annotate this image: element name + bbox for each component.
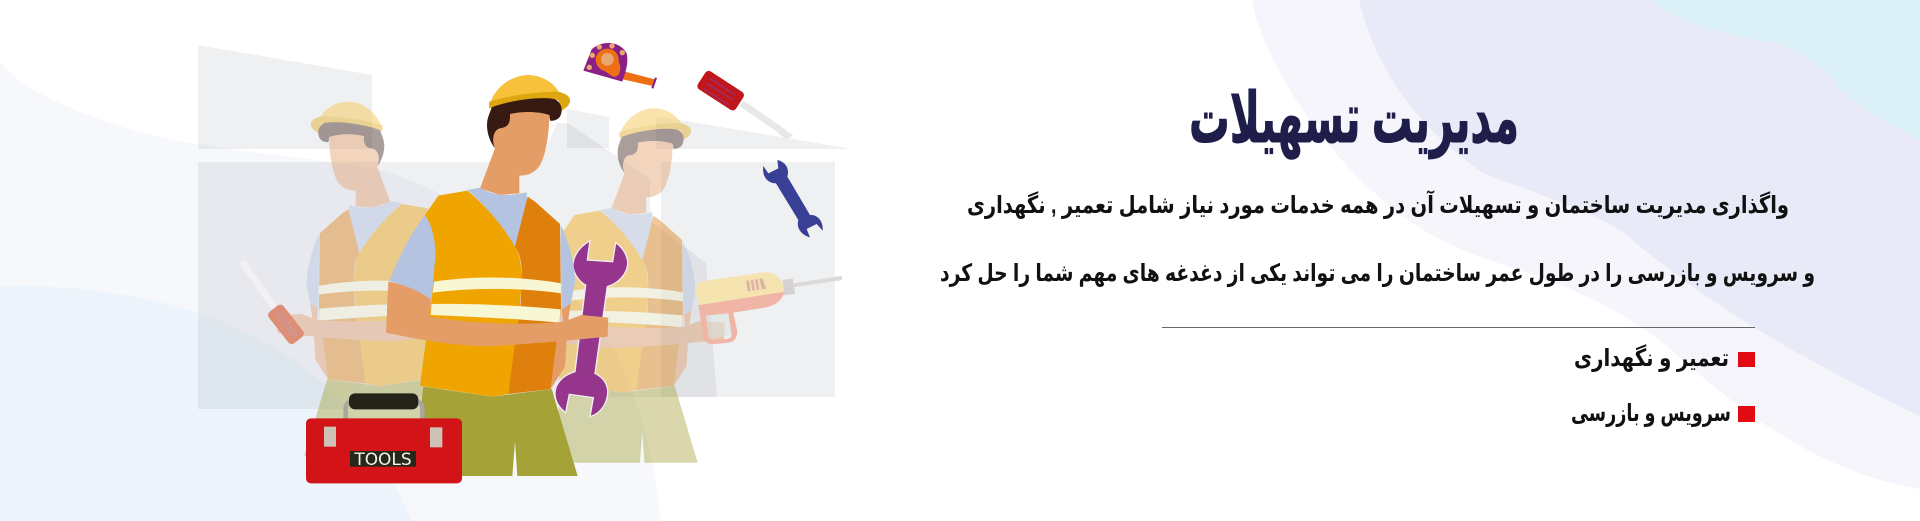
trousers bbox=[413, 387, 578, 476]
centre worker bbox=[386, 75, 628, 476]
face and neck bbox=[480, 112, 549, 195]
icon: screwdriver in left worker's hand bbox=[243, 263, 306, 346]
side skin bbox=[551, 303, 571, 389]
background wave: left pale bbox=[0, 62, 660, 521]
vest light panel bbox=[420, 191, 522, 397]
icon: toolbox: TOOLS bbox=[353, 450, 412, 469]
icon: tape measure bbox=[583, 43, 657, 89]
background wave: right blue bbox=[1359, 0, 1920, 416]
vest dark panel bbox=[508, 197, 561, 394]
background wave: left blue bbox=[0, 286, 412, 521]
shirt bbox=[389, 188, 575, 309]
bullet 1: تعمیر و نگهداری bbox=[1574, 344, 1729, 372]
hat brim bbox=[489, 92, 570, 111]
background wave: right lavender bbox=[1252, 0, 1920, 489]
building silhouette bbox=[198, 45, 852, 409]
icon: toolbox bbox=[306, 393, 462, 483]
background wave: top right teal bbox=[1654, 0, 1920, 140]
hair bbox=[487, 98, 562, 148]
arm bbox=[386, 282, 608, 346]
icon: blue wrench bbox=[763, 160, 823, 237]
bullet 2: سرویس و بازرسی bbox=[1571, 400, 1731, 427]
wrench bbox=[555, 241, 628, 417]
left worker (faded) bbox=[277, 102, 474, 456]
divider bbox=[1162, 327, 1755, 328]
title: مدیریت تسهیلات bbox=[1189, 79, 1519, 159]
icon: flying screwdriver bbox=[696, 69, 793, 139]
hard hat bbox=[489, 75, 559, 108]
vest stripes bbox=[431, 277, 561, 323]
right worker (faded) bbox=[528, 108, 725, 463]
icon: drill bbox=[696, 272, 842, 344]
